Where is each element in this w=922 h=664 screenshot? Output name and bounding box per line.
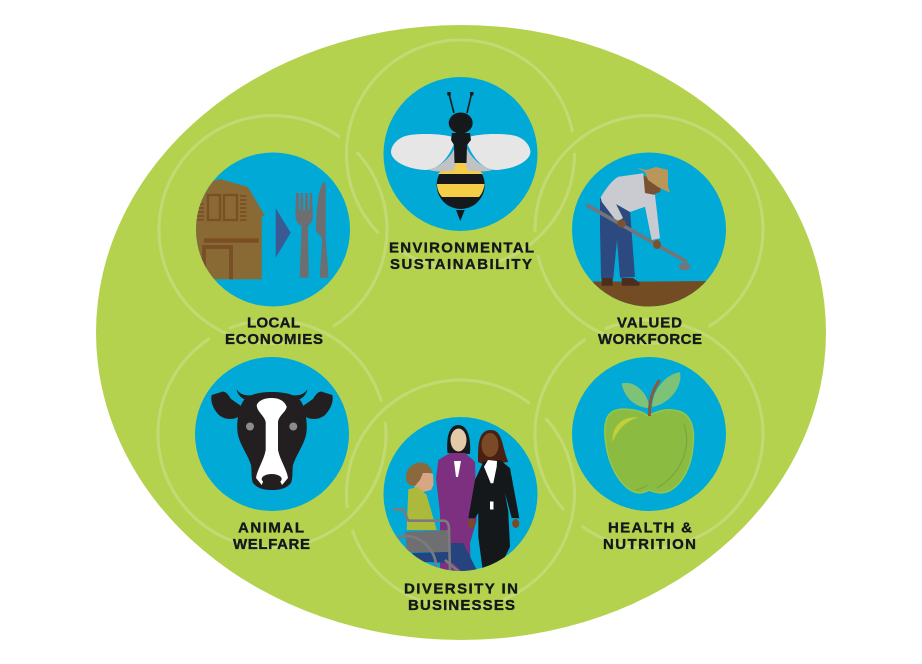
- label: local economies: ECONOMIES: [225, 331, 323, 348]
- label: animal welfare: ANIMAL: [238, 520, 304, 537]
- label: diversity in businesses: BUSINESSES: [408, 597, 515, 614]
- label: valued workforce: VALUED: [617, 314, 682, 332]
- label: valued workforce: [598, 314, 702, 348]
- interlocking pale rings: [112, 0, 810, 655]
- green oval background: [96, 25, 826, 640]
- panel: valued workforce: [572, 152, 726, 348]
- infographic: [96, 25, 826, 640]
- label: health and nutrition: NUTRITION: [603, 536, 696, 553]
- icon: arrow: [276, 208, 291, 258]
- label: health and nutrition: [603, 520, 696, 553]
- label: environmental sustainability: SUSTAINABILITY: [390, 256, 532, 273]
- label: environmental sustainability: [389, 240, 534, 273]
- icon: bee: [391, 92, 530, 221]
- icon: farmer with hoe: [587, 167, 707, 310]
- label: diversity in businesses: [404, 580, 518, 614]
- icon: barn: [190, 179, 265, 279]
- label: local economies: LOCAL: [247, 315, 300, 332]
- label: valued workforce: WORKFORCE: [598, 331, 702, 348]
- icon: cow head: [211, 389, 333, 490]
- panel: diversity in businesses: [384, 417, 538, 614]
- panel: environmental sustainability: [384, 77, 538, 273]
- icon: green apple: [605, 372, 693, 493]
- label: environmental sustainability: ENVIRONMENTAL: [389, 240, 534, 256]
- label: animal welfare: [233, 520, 310, 553]
- icon: fork and knife: [296, 182, 328, 278]
- label: local economies: [225, 315, 323, 348]
- panel: animal welfare: [195, 357, 349, 553]
- icon: group of people: [393, 425, 519, 580]
- label: diversity in businesses: DIVERSITY IN: [404, 580, 518, 597]
- panel: health and nutrition: [572, 357, 726, 553]
- label: animal welfare: WELFARE: [233, 536, 310, 553]
- label: health and nutrition: HEALTH &: [608, 520, 692, 537]
- panel: local economies: [190, 152, 350, 348]
